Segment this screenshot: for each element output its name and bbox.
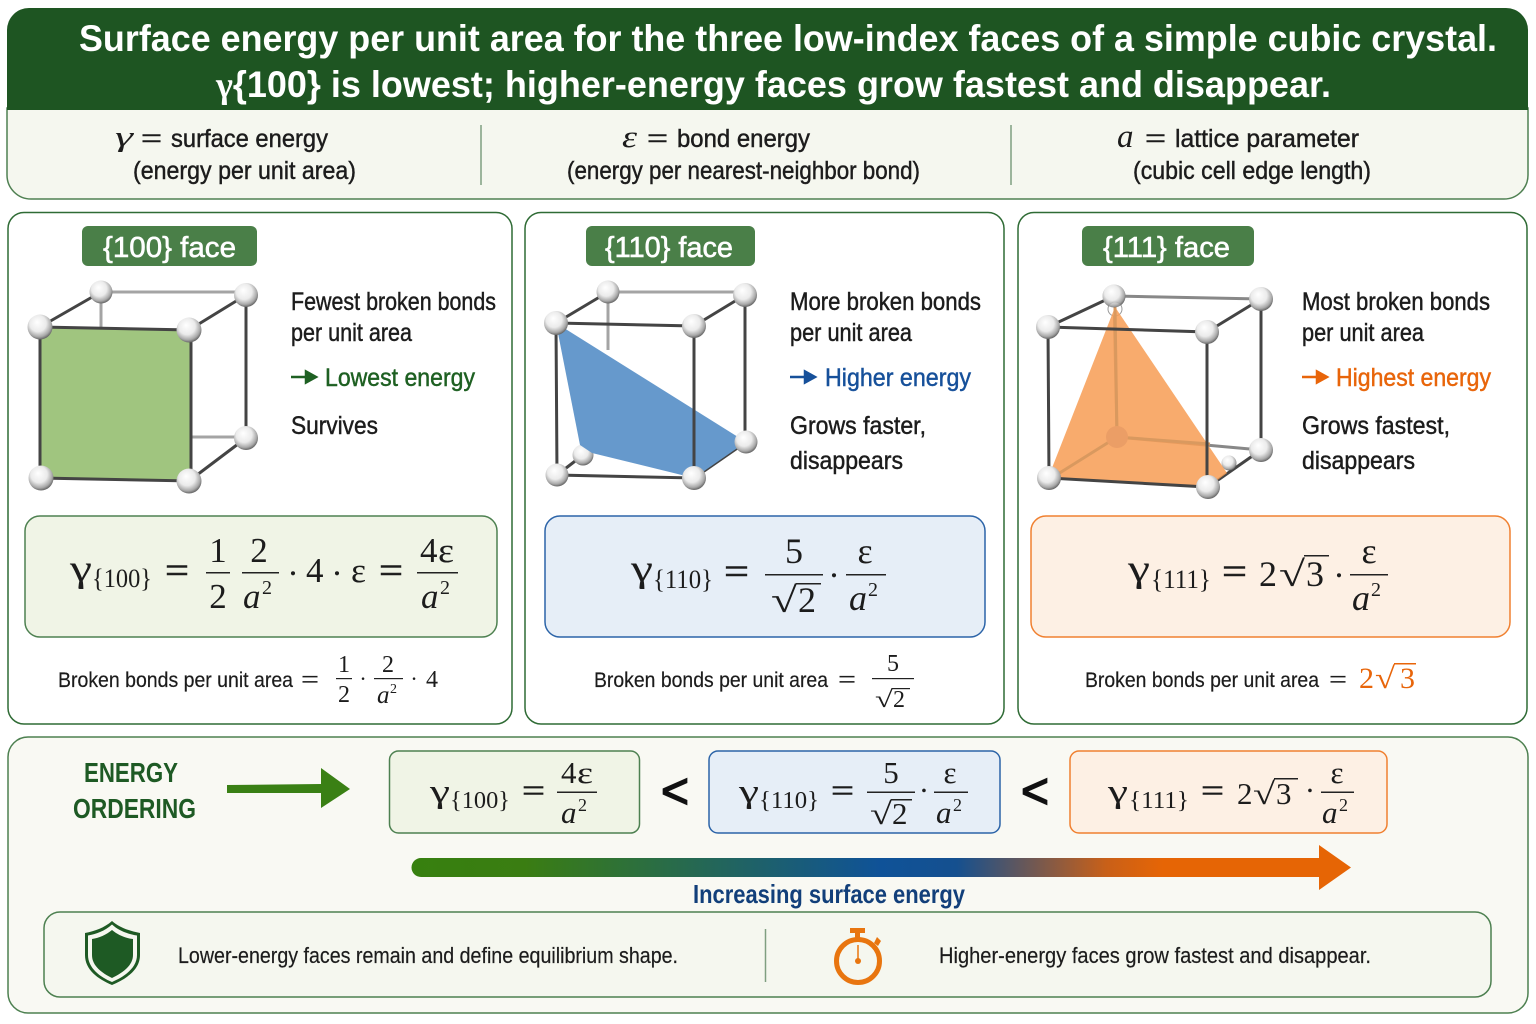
ordering box: gamma 110	[709, 751, 1000, 833]
definition: gamma: surface energy	[171, 125, 328, 153]
formula box: gamma 110: 5	[785, 531, 803, 571]
panel: energy ordering	[8, 737, 1528, 1013]
broken bonds: {111}	[1085, 662, 1416, 695]
description: {111}: disappears	[1302, 447, 1415, 475]
ordering box: gamma 110: γ	[738, 774, 759, 810]
broken bonds: {100}: 2	[338, 682, 350, 708]
formula box: gamma 111	[1031, 516, 1510, 637]
panel: {111} face	[1018, 212, 1527, 724]
formula box: gamma 100: a	[243, 577, 260, 616]
description: {100}: per unit area	[291, 319, 412, 347]
definition: lattice parameter	[1117, 119, 1371, 185]
broken bonds: {110}: 5	[887, 651, 899, 677]
broken bonds: {111}: 3	[1400, 662, 1415, 695]
badge: {100} face	[82, 226, 257, 266]
formula box: gamma 100: 4	[420, 531, 438, 570]
ordering box: gamma 111: 2	[1339, 795, 1348, 815]
formula box: gamma 100	[25, 516, 497, 637]
definition: lattice parameter: =	[1145, 122, 1166, 155]
icon: shield	[85, 921, 140, 985]
description: {100}: Lowest energy	[325, 364, 475, 392]
formula box: gamma 110: ε	[857, 531, 873, 571]
formula box: gamma 100: γ	[69, 548, 92, 590]
panel: {110} face	[525, 212, 1004, 724]
broken bonds: {110}: Broken bonds per unit area	[594, 669, 828, 692]
description: {111}: Highest energy	[1336, 364, 1491, 392]
definition: epsilon: (energy per nearest-neighbor bond)	[567, 157, 920, 185]
broken bonds: {100}: Broken bonds per unit area	[58, 669, 293, 692]
formula box: gamma 100: 2	[250, 531, 268, 570]
description: {111}: per unit area	[1302, 319, 1424, 347]
ordering box: gamma 110: √	[870, 796, 892, 831]
formula box: gamma 111: ε	[1361, 531, 1377, 571]
formula box: gamma 110: √	[771, 580, 797, 620]
formula box: gamma 100: {100}	[92, 564, 152, 593]
formula box: gamma 110: 2	[798, 580, 816, 620]
ordering box: gamma 100: ε	[577, 755, 593, 790]
formula box: gamma 110: {110}	[653, 565, 713, 594]
description: {100}	[291, 288, 496, 440]
description: {111}: Most broken bonds	[1302, 288, 1490, 316]
ordering box: gamma 111: {111}	[1129, 788, 1189, 814]
formula box: gamma 110: =	[724, 551, 749, 593]
definition: lattice parameter: a	[1117, 119, 1134, 155]
formula box: gamma 111: 3	[1306, 554, 1324, 594]
badge: {111} face	[1082, 226, 1254, 266]
formula box: gamma 110: a	[849, 578, 867, 618]
ordering box: gamma 110: a	[936, 795, 952, 830]
cube with blue {110} plane	[544, 280, 758, 490]
less than: <	[661, 763, 689, 819]
formula box: gamma 110: 2	[868, 579, 878, 601]
description: {100}: Survives	[291, 412, 378, 440]
ordering box: gamma 111: ε	[1330, 755, 1344, 790]
ordering box: gamma 111: 2	[1237, 776, 1252, 811]
icon: stopwatch	[836, 928, 881, 982]
formula box: gamma 111: =	[1222, 551, 1247, 593]
definitions panel	[7, 108, 1528, 199]
description: {110}: per unit area	[790, 319, 912, 347]
formula box: gamma 100: =	[165, 550, 189, 592]
ordering box: gamma 111: 3	[1276, 776, 1292, 811]
ordering box: gamma 100	[390, 751, 640, 833]
broken bonds: {110}: =	[838, 665, 856, 694]
formula box: gamma 111: ·	[1334, 559, 1344, 592]
ordering box: gamma 110: ε	[943, 755, 957, 790]
ordering box: gamma 100: a	[561, 795, 576, 830]
ordering box: gamma 110: 5	[883, 755, 899, 790]
ordering box: gamma 111: =	[1201, 772, 1224, 808]
takeaway box	[44, 912, 1491, 997]
arrow: to ordering	[227, 768, 350, 808]
formula box: gamma 100: 2	[440, 577, 450, 599]
broken bonds: {100}: ·	[359, 666, 367, 691]
ordering box: gamma 111: a	[1322, 795, 1338, 830]
title banner	[7, 8, 1528, 110]
definition: lattice parameter: lattice parameter	[1175, 125, 1359, 153]
formula box: gamma 100: 1	[209, 531, 227, 570]
broken bonds: {111}: Broken bonds per unit area	[1085, 669, 1319, 692]
formula box: gamma 100: ε	[438, 531, 454, 570]
formula box: gamma 111: √	[1279, 554, 1305, 594]
description: {110}: Higher energy	[825, 364, 971, 392]
broken bonds: {100}: 2	[382, 652, 394, 678]
formula box: gamma 110	[545, 516, 985, 637]
definition: gamma: (energy per unit area)	[133, 157, 356, 185]
definition: epsilon: bond energy	[677, 125, 810, 153]
heading: energy ordering: ORDERING	[73, 793, 196, 824]
formula box: gamma 100: ·	[332, 557, 342, 590]
description: {111}	[1302, 288, 1491, 475]
formula box: gamma 111: {111}	[1151, 565, 1211, 594]
heading: energy ordering: ENERGY	[84, 757, 178, 788]
ordering box: gamma 111	[1070, 751, 1387, 833]
definition: gamma	[115, 121, 356, 185]
formula box: gamma 111: γ	[1127, 548, 1150, 590]
ordering box: gamma 100: =	[522, 772, 545, 808]
takeaway: higher-energy faces: Higher-energy faces grow fastest and disappear.	[939, 943, 1371, 968]
description: {100}: Fewest broken bonds	[291, 288, 496, 316]
title line 2: γ{100} is lowest; higher-energy faces grow fastest and disappear.	[215, 64, 1331, 106]
gradient arrow: increasing energy	[412, 845, 1351, 890]
definition: epsilon	[567, 119, 920, 185]
broken bonds: {111}: =	[1329, 665, 1347, 694]
badge: {100} face: {100} face	[103, 232, 236, 264]
formula box: gamma 111: 2	[1259, 554, 1277, 594]
description: {110}: Grows faster,	[790, 412, 926, 440]
description: {110}	[790, 288, 981, 475]
broken bonds: {100}	[58, 652, 438, 709]
formula box: gamma 111: a	[1352, 578, 1370, 618]
ordering box: gamma 110: 2	[953, 795, 962, 815]
description: {110}: disappears	[790, 447, 903, 475]
broken bonds: {111}: 2	[1359, 662, 1374, 695]
definition: epsilon: ε	[622, 119, 638, 154]
definition: gamma: γ	[115, 121, 135, 153]
formula box: gamma 110: ·	[829, 559, 839, 592]
label: increasing surface energy: Increasing surface energy	[693, 879, 965, 909]
ordering box: gamma 110: =	[831, 772, 854, 808]
cube with green {100} face	[28, 280, 258, 494]
broken bonds: {111}: √	[1375, 662, 1396, 695]
title line 1: Surface energy per unit area for the three low-index faces of a simple cubic crystal.	[79, 18, 1497, 59]
heading: energy ordering	[73, 757, 196, 824]
formula box: gamma 100: 2	[262, 577, 272, 599]
ordering box: gamma 110: 2	[892, 796, 908, 831]
ordering box: gamma 100: {100}	[450, 788, 510, 814]
formula box: gamma 100: 4	[306, 551, 324, 590]
formula box: gamma 100: ·	[288, 557, 298, 590]
broken bonds: {100}: 4	[426, 667, 438, 693]
ordering box: gamma 100: γ	[429, 774, 450, 810]
formula box: gamma 100: 2	[209, 577, 227, 616]
ordering box: gamma 111: ·	[1306, 776, 1314, 805]
ordering box: gamma 111: γ	[1107, 774, 1128, 810]
badge: {111} face: {111} face	[1103, 232, 1230, 264]
ordering box: gamma 100: 4	[561, 755, 577, 790]
description: {111}: Grows fastest,	[1302, 412, 1450, 440]
broken bonds: {110}	[594, 651, 914, 713]
broken bonds: {100}: 1	[338, 652, 350, 678]
ordering box: gamma 110: {110}	[759, 788, 819, 814]
ordering box: gamma 100: 2	[578, 795, 587, 815]
formula box: gamma 100: a	[421, 577, 438, 616]
ordering box: gamma 111: √	[1253, 776, 1275, 811]
broken bonds: {100}: 2	[390, 682, 397, 697]
broken bonds: {110}: √	[875, 687, 894, 713]
definition: gamma: =	[141, 122, 162, 155]
broken bonds: {100}: =	[301, 665, 319, 694]
ordering box: gamma 110: ·	[920, 776, 928, 805]
formula box: gamma 100: ε	[351, 551, 366, 590]
less than: <	[1021, 763, 1049, 819]
broken bonds: {100}: a	[377, 682, 390, 709]
description: {110}: More broken bonds	[790, 288, 981, 316]
panel: {100} face	[8, 212, 512, 724]
formula box: gamma 110: γ	[630, 548, 653, 590]
formula box: gamma 111: 2	[1371, 579, 1381, 601]
badge: {110} face	[586, 226, 755, 266]
takeaway: lower-energy faces: Lower-energy faces remain and define equilibrium shape.	[178, 943, 678, 968]
definition: lattice parameter: (cubic cell edge length)	[1133, 157, 1371, 185]
definition: epsilon: =	[647, 122, 668, 155]
cube with orange {111} plane	[1036, 284, 1273, 499]
broken bonds: {110}: 2	[893, 687, 905, 713]
badge: {110} face: {110} face	[605, 232, 733, 264]
formula box: gamma 100: =	[379, 550, 403, 592]
broken bonds: {100}: ·	[410, 666, 418, 691]
